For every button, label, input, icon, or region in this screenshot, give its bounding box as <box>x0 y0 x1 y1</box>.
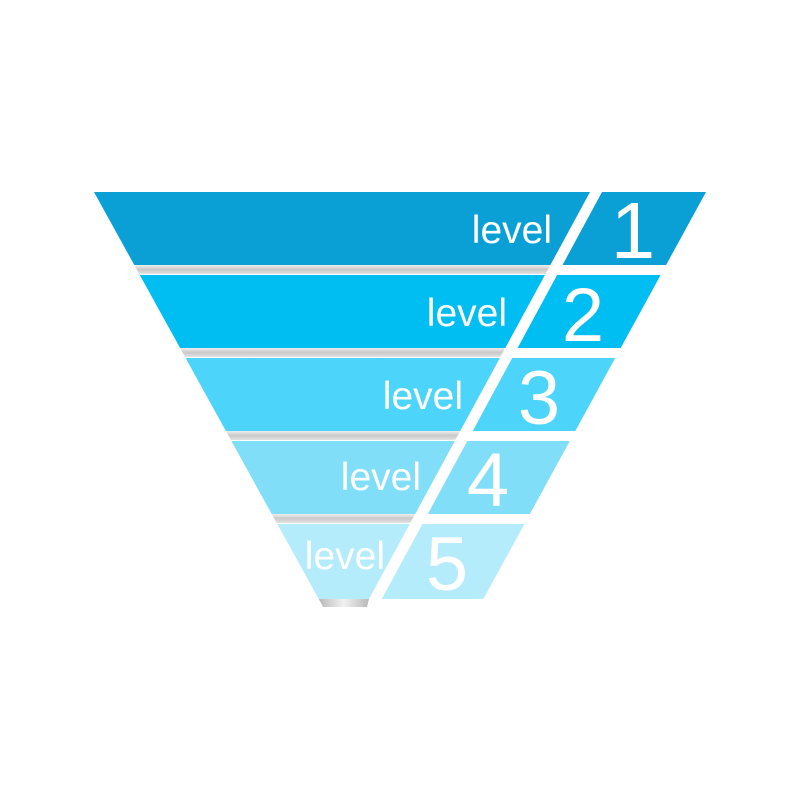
level 3 <box>186 356 615 441</box>
level 4 <box>231 438 570 523</box>
level 4: 4 <box>467 438 509 523</box>
level 3: 3 <box>518 356 560 441</box>
level 3: level <box>383 375 463 418</box>
funnel <box>94 186 706 607</box>
level 1: level <box>472 209 552 252</box>
level 1: 1 <box>611 186 655 275</box>
level 2: level <box>427 292 507 335</box>
level 5: level <box>305 535 385 578</box>
level 1 <box>94 186 706 275</box>
separators <box>134 265 550 607</box>
level 2: 2 <box>562 273 604 358</box>
level 4: level <box>341 456 421 499</box>
level 2 <box>140 273 661 358</box>
level 5: 5 <box>426 522 468 607</box>
level 5 <box>277 522 524 607</box>
